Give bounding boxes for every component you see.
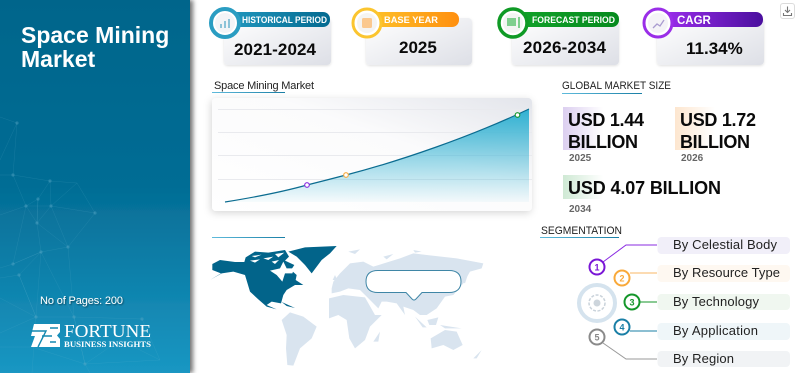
world map [210,246,483,366]
market size 2026: USD 1.72 [680,110,756,130]
stat card: base year: BASE YEAR [384,15,439,25]
data point 2025 [305,183,309,187]
segment 1: by celestial body [590,237,790,274]
segment 1: by celestial body: 1 [594,262,600,272]
title: Market [21,46,95,72]
market size 2025: 2025 [569,153,592,164]
data point 2026 [344,173,348,177]
segment 3: by technology: 3 [629,298,635,308]
stat card: CAGR: 11.34% [686,39,743,58]
Eurasia, Africa, Australia [329,249,483,358]
sidebar panel [0,0,190,373]
stat card: forecast period: FORECAST PERIOD [532,15,615,25]
logo: Fortune Business Insights: FORTUNE [64,321,151,341]
icon: download button [780,4,794,18]
market size 2034: 2034 [569,204,592,215]
market size 2025: BILLION [568,132,638,152]
segment hub icon [579,285,615,321]
segment 2: by resource type [614,265,790,286]
logo: Fortune Business Insights [31,321,151,349]
stat card: CAGR [644,9,764,65]
area under curve [225,109,529,202]
segment 4: by application: By Application [673,323,758,338]
highlighted region: North America [210,246,337,309]
stat card: base year [353,9,472,65]
chart heading: Space Mining Market [214,80,314,92]
map heading underline [212,237,285,238]
market size 2025: USD 1.44 [568,110,644,130]
stat card: forecast period [499,9,619,65]
market size 2026 [675,107,756,164]
market size 2026: BILLION [680,132,750,152]
logo: Fortune Business Insights: BUSINESS INSIGHTS [64,339,151,349]
data point 2034 [515,113,520,117]
segment 4: by application: 4 [619,322,625,332]
segment 1: by celestial body: By Celestial Body [673,237,778,252]
page count: No of Pages: 200 [40,295,123,307]
segment 2: by resource type: 2 [619,274,625,284]
segment 4: by application [614,320,790,340]
stat card: historical period [211,9,331,65]
growth line [225,109,529,202]
market size 2026: 2026 [681,153,704,164]
segment 3: by technology [624,294,790,310]
stat card: forecast period: 2026-2034 [523,38,607,57]
market size 2034 [563,175,721,215]
stat card: base year: 2025 [399,38,437,57]
segmentation heading: SEGMENTATION [541,225,622,237]
market size 2025 [563,107,644,164]
stat card: CAGR: CAGR [677,15,712,27]
stat card: historical period: 2021-2024 [234,40,317,59]
South America [282,312,317,366]
segment 2: by resource type: By Resource Type [673,265,780,280]
global market size heading: GLOBAL MARKET SIZE [562,80,671,92]
market size 2034: USD 4.07 BILLION [568,178,721,198]
area chart panel [212,98,532,211]
segment 5: by region [590,330,790,367]
stat card: historical period: HISTORICAL PERIOD [242,15,327,25]
segment 5: by region: By Region [673,351,734,366]
callout bubble [366,270,461,300]
segment 5: by region: 5 [594,332,600,342]
segment 3: by technology: By Technology [673,294,760,309]
title: Space Mining [21,22,169,48]
